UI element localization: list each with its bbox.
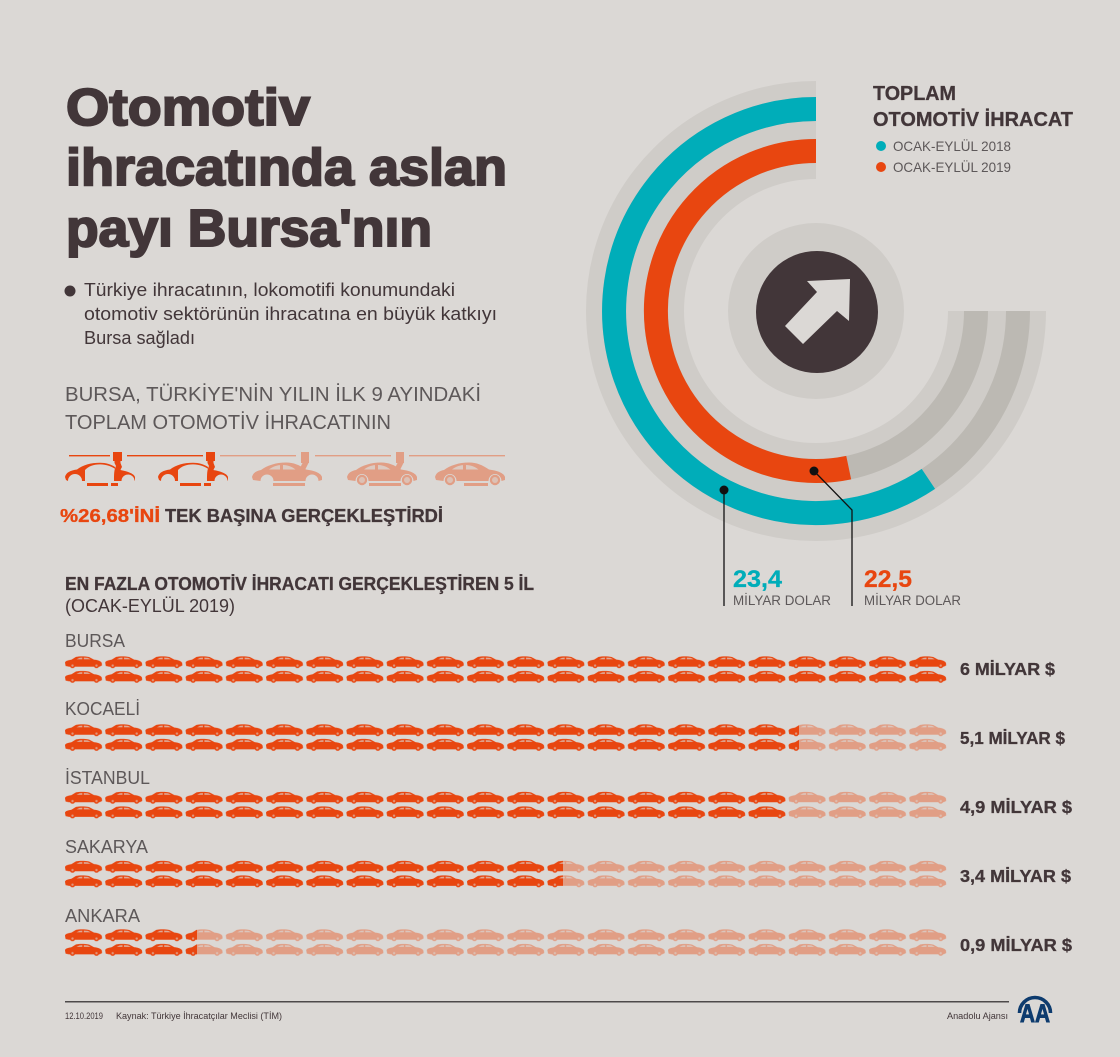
2019 arc [656,151,849,471]
subheading: Bursa share: TOPLAM OTOMOTİV İHRACATININ [65,411,391,434]
title: payı Bursa'nın [66,200,432,258]
legend: OTOMOTİV İHRACAT [873,108,1073,131]
footer: 12.10.2019 [65,1011,103,1021]
intro text block [64,279,497,348]
icon: up arrow in circle [728,223,904,399]
track [635,130,997,492]
share statement: %26,68'İNİ [60,506,160,526]
radial chart: total automotive exports [614,109,1018,513]
row: İstanbul: İSTANBUL [65,768,150,788]
row: İstanbul: 4,9 MİLYAR $ [960,797,1072,817]
row: Sakarya: SAKARYA [65,837,148,857]
row: Sakarya [65,837,1071,888]
row: İstanbul [65,768,1072,818]
assembly stage 2 [127,452,228,486]
title: ihracatında aslan [66,139,507,197]
row: Sakarya: 3,4 MİLYAR $ [960,866,1071,886]
footer [65,1001,1009,1021]
intro text block: Türkiye ihracatının, lokomotifi konumundaki [84,279,455,300]
row: Ankara: ANKARA [65,906,140,926]
share statement: TEK BAŞINA GERÇEKLEŞTİRDİ [165,506,443,526]
row: Bursa: 6 MİLYAR $ [960,659,1055,679]
row: Kocaeli: KOCAELİ [65,699,140,719]
section heading: top 5 provinces [65,574,534,616]
row: Kocaeli: 5,1 MİLYAR $ [960,728,1065,748]
callout: 2019 value: 22,5 [864,566,912,593]
factory line icons [65,452,505,486]
title: Otomotiv [66,79,310,137]
section heading: top 5 provinces: EN FAZLA OTOMOTİV İHRACATI GERÇEKLEŞTİREN 5 İL [65,574,534,594]
row: Bursa: BURSA [65,631,125,651]
remaining 2018 track [614,109,1018,513]
row: Bursa [65,631,1055,683]
intro text block: otomotiv sektörünün ihracatına en büyük katkıyı [84,303,497,324]
row: Ankara [65,906,1072,956]
intro text block: Bursa sağladı [84,327,195,348]
callout: 2019 value [810,466,961,608]
icon: Anadolu Agency logo: AA [1020,1000,1050,1028]
section heading: top 5 provinces: (OCAK-EYLÜL 2019) [65,596,235,616]
bullet [64,286,76,296]
legend [873,83,1073,175]
callout: 2018 value: 23,4 [733,566,783,593]
assembly stage 5 [409,455,505,486]
assembly stage 3 [220,452,322,486]
legend: TOPLAM [873,83,956,105]
legend: OCAK-EYLÜL 2019 [893,158,1011,175]
row: Kocaeli [65,699,1065,751]
title [66,79,507,258]
subheading: Bursa share [65,383,481,434]
2018 arc [614,109,928,513]
subheading: Bursa share: BURSA, TÜRKİYE'NİN YILIN İLK 9 AYINDAKİ [65,383,481,406]
callout: 2019 value: MİLYAR DOLAR [864,593,961,608]
assembly stage 4 [315,452,417,486]
footer: Kaynak: Türkiye İhracatçılar Meclisi (TİM) [116,1011,282,1021]
callout: 2018 value [720,486,831,608]
callout: 2018 value: MİLYAR DOLAR [733,593,831,608]
row: Ankara: 0,9 MİLYAR $ [960,935,1072,955]
assembly stage 1 [65,452,135,486]
footer: Anadolu Ajansı [947,1011,1008,1021]
legend: OCAK-EYLÜL 2018 [893,137,1011,154]
remaining 2019 track [656,151,976,471]
